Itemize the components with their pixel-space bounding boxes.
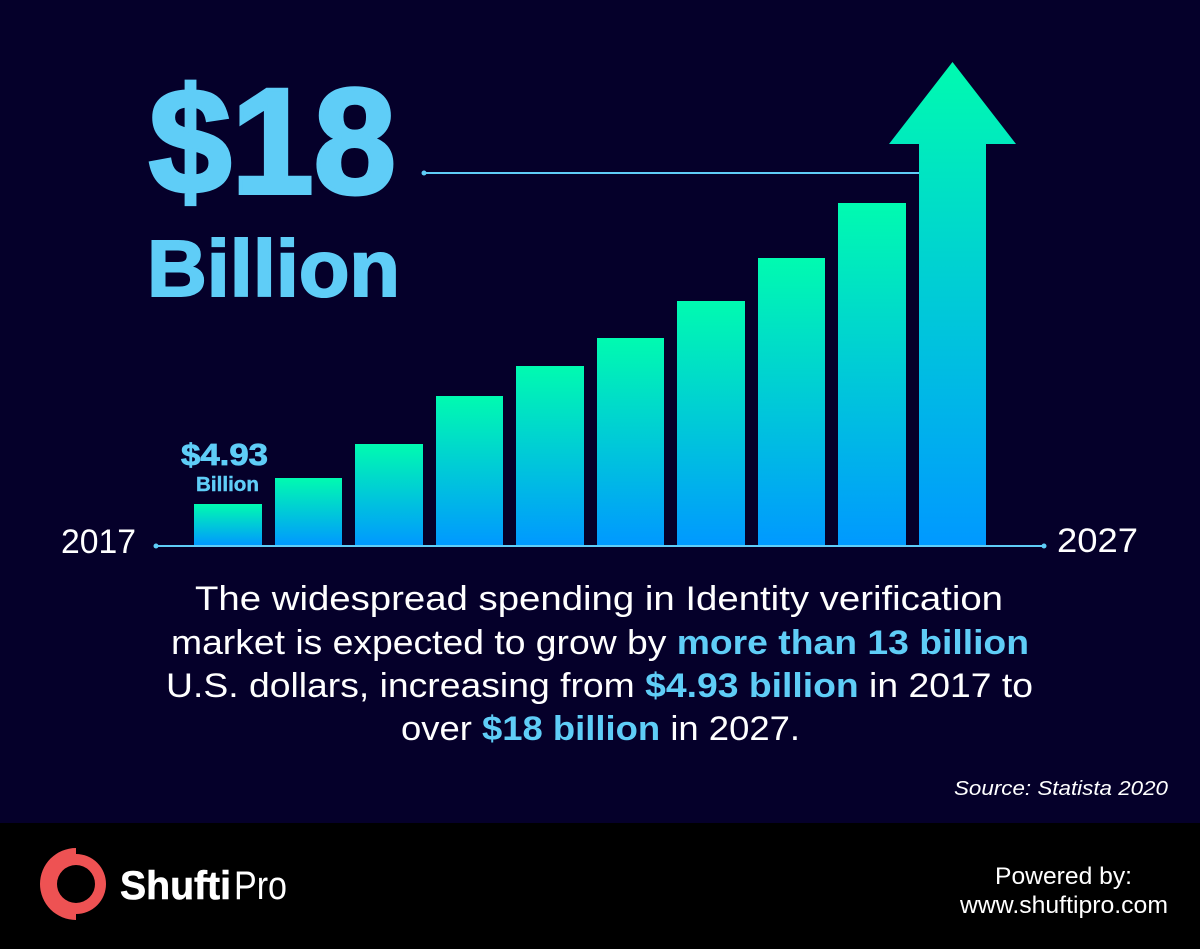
- ShuftiPro wordmark: Pro: [234, 864, 287, 908]
- bar chart: market growth 2017 to 2027: [194, 203, 906, 545]
- ShuftiPro wordmark: Shufti: [120, 864, 231, 908]
- description paragraph: U.S. dollars, increasing from $4.93 billion in 2017 to: [166, 667, 1033, 705]
- first bar label: $4.93 Billion: [181, 437, 268, 496]
- description paragraph: over $18 billion in 2027.: [401, 710, 800, 748]
- first bar label: $4.93 Billion: Billion: [196, 474, 259, 496]
- source note: Source: Statista 2020: [954, 778, 1168, 800]
- baseline axis: [154, 544, 1046, 548]
- description paragraph: market is expected to grow by more than 13 billion: [171, 624, 1029, 662]
- powered by text: [959, 863, 1168, 919]
- footer band: [0, 823, 1200, 949]
- headline: $18 Billion: $18: [149, 57, 396, 225]
- headline: $18 Billion: [147, 57, 400, 313]
- powered by text: Powered by:: [995, 863, 1132, 890]
- leader line from headline to arrow: [422, 170, 920, 176]
- growth arrow: [889, 62, 1016, 545]
- description paragraph: [166, 580, 1033, 748]
- ShuftiPro wordmark: [120, 864, 287, 908]
- first bar label: $4.93 Billion: $4.93: [181, 437, 268, 472]
- axis label: 2027: 2027: [1057, 522, 1138, 560]
- headline: $18 Billion: Billion: [147, 224, 400, 313]
- axis label: 2017: 2017: [61, 523, 136, 561]
- icon: ShuftiPro ring logo: [40, 848, 106, 920]
- powered by text: www.shuftipro.com: [959, 892, 1168, 919]
- description paragraph: The widespread spending in Identity verification: [195, 580, 1003, 618]
